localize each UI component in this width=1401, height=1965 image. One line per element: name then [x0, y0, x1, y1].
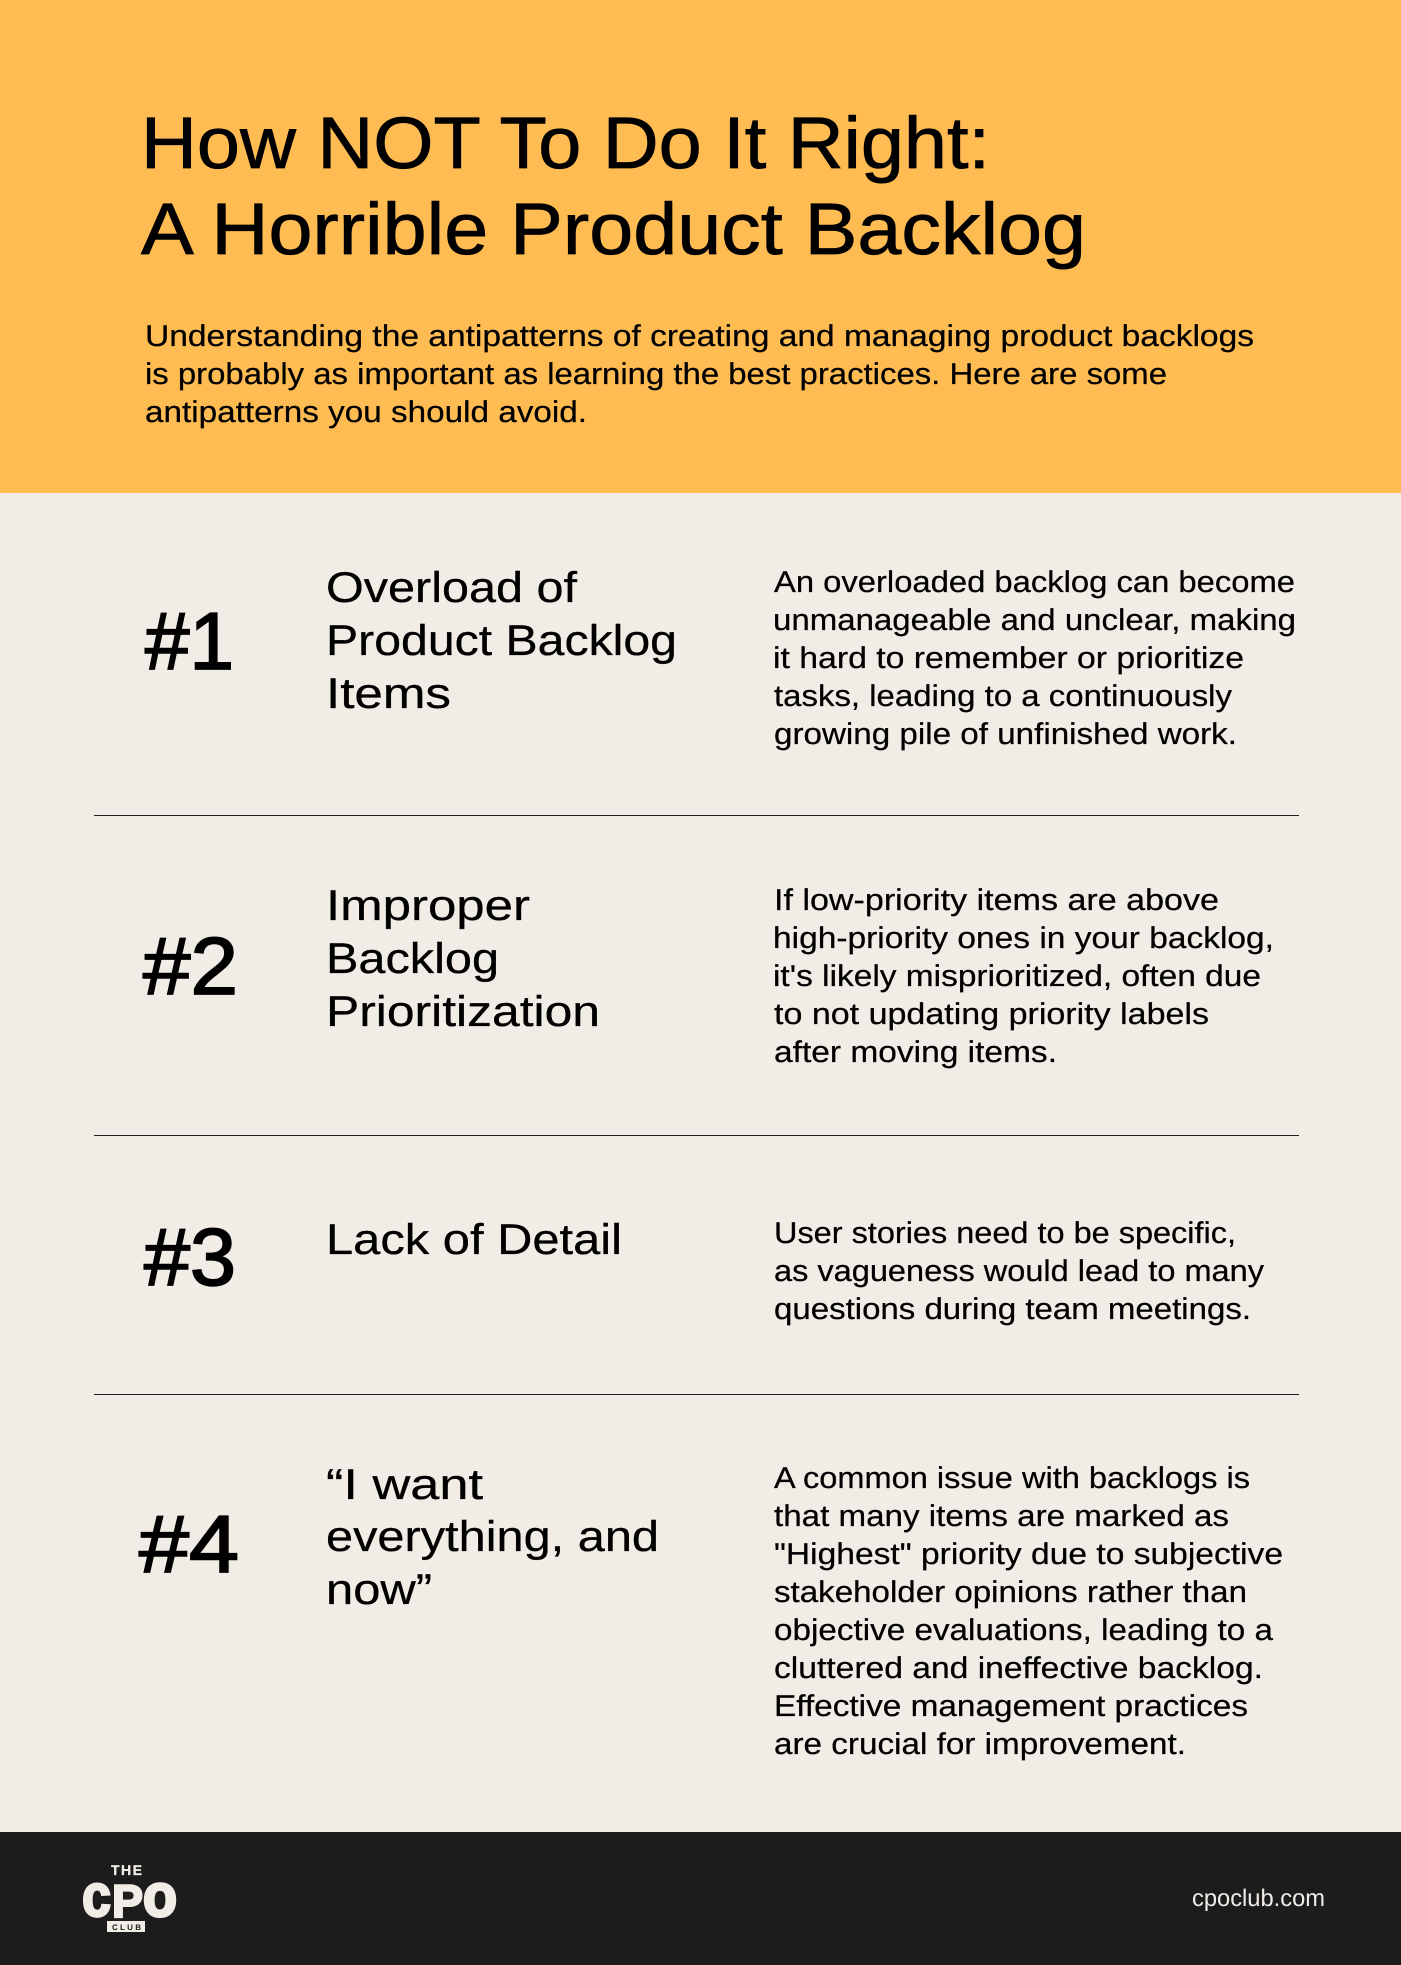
description 4: Effective management practices: [774, 1690, 1248, 1723]
description 4: A common issue with backlogs is: [774, 1462, 1250, 1495]
description 1: [773, 566, 1296, 751]
title: How NOT To Do It Right:: [141, 103, 990, 184]
logo: The CPO Club: THE: [111, 1862, 142, 1878]
heading 1: Overload of: [326, 564, 578, 612]
intro text: Understanding the antipatterns of creating and managing product backlogs: [145, 320, 1254, 353]
description 1: An overloaded backlog can become: [774, 566, 1295, 599]
number 1: #1: [145, 597, 234, 687]
description 3: questions during team meetings.: [774, 1293, 1251, 1326]
description 2: after moving items.: [774, 1036, 1057, 1069]
description 4: [774, 1462, 1283, 1761]
panel: antipattern 1: [145, 564, 1296, 751]
intro text: antipatterns you should avoid.: [145, 396, 587, 429]
description 4: are crucial for improvement.: [774, 1728, 1186, 1761]
description 2: to not updating priority labels: [774, 998, 1209, 1031]
panel: antipattern 2: [143, 882, 1274, 1069]
description 4: cluttered and ineffective backlog.: [774, 1652, 1263, 1685]
intro text: is probably as important as learning the best practices. Here are some: [145, 358, 1167, 391]
number 3: #3: [144, 1213, 236, 1303]
heading 1: [326, 564, 677, 718]
panel: antipattern 3: [144, 1213, 1264, 1326]
number 4: #4: [139, 1500, 239, 1590]
description 4: stakeholder opinions rather than: [774, 1576, 1247, 1609]
description 4: that many items are marked as: [774, 1500, 1229, 1533]
description 3: as vagueness would lead to many: [774, 1255, 1264, 1288]
heading 4: everything, and: [326, 1513, 659, 1561]
heading 4: “I want: [326, 1461, 483, 1509]
description 1: unmanageable and unclear, making: [773, 604, 1296, 637]
website url: cpoclub.com: [1192, 1885, 1325, 1912]
heading 2: Improper: [326, 882, 530, 930]
heading 2: [326, 882, 600, 1036]
divider 2: [94, 1135, 1299, 1136]
logo: The CPO Club: [82, 1862, 177, 1932]
description 3: User stories need to be specific,: [774, 1217, 1236, 1250]
number 2: #2: [143, 922, 238, 1012]
panel: antipattern 4: [139, 1461, 1283, 1761]
description 1: tasks, leading to a continuously: [774, 680, 1232, 713]
heading 4: [326, 1461, 659, 1614]
heading 1: Product Backlog: [326, 617, 677, 665]
description 1: growing pile of unfinished work.: [774, 718, 1237, 751]
description 1: it hard to remember or prioritize: [773, 642, 1244, 675]
logo: The CPO Club: o: [143, 1862, 177, 1929]
logo: The CPO Club: c: [82, 1862, 111, 1929]
heading 2: Backlog: [326, 935, 499, 983]
description 4: objective evaluations, leading to a: [774, 1614, 1273, 1647]
panel: footer: [0, 1832, 1401, 1965]
title: [141, 103, 1086, 270]
logo: The CPO Club: CLUB: [112, 1923, 141, 1932]
description 4: "Highest" priority due to subjective: [774, 1538, 1283, 1571]
description 2: [773, 884, 1274, 1069]
heading 3: Lack of Detail: [326, 1216, 622, 1264]
panel: header: [0, 0, 1401, 493]
divider 3: [94, 1394, 1299, 1395]
logo: The CPO Club: P: [112, 1875, 143, 1927]
divider 1: [94, 815, 1299, 816]
intro text: [145, 320, 1254, 429]
title: A Horrible Product Backlog: [141, 189, 1086, 270]
heading 4: now”: [326, 1566, 432, 1614]
description 2: high-priority ones in your backlog,: [773, 922, 1274, 955]
description 3: [774, 1217, 1264, 1326]
description 2: If low-priority items are above: [774, 884, 1219, 917]
heading 2: Prioritization: [326, 988, 600, 1036]
description 2: it's likely misprioritized, often due: [773, 960, 1261, 993]
heading 1: Items: [326, 670, 451, 718]
